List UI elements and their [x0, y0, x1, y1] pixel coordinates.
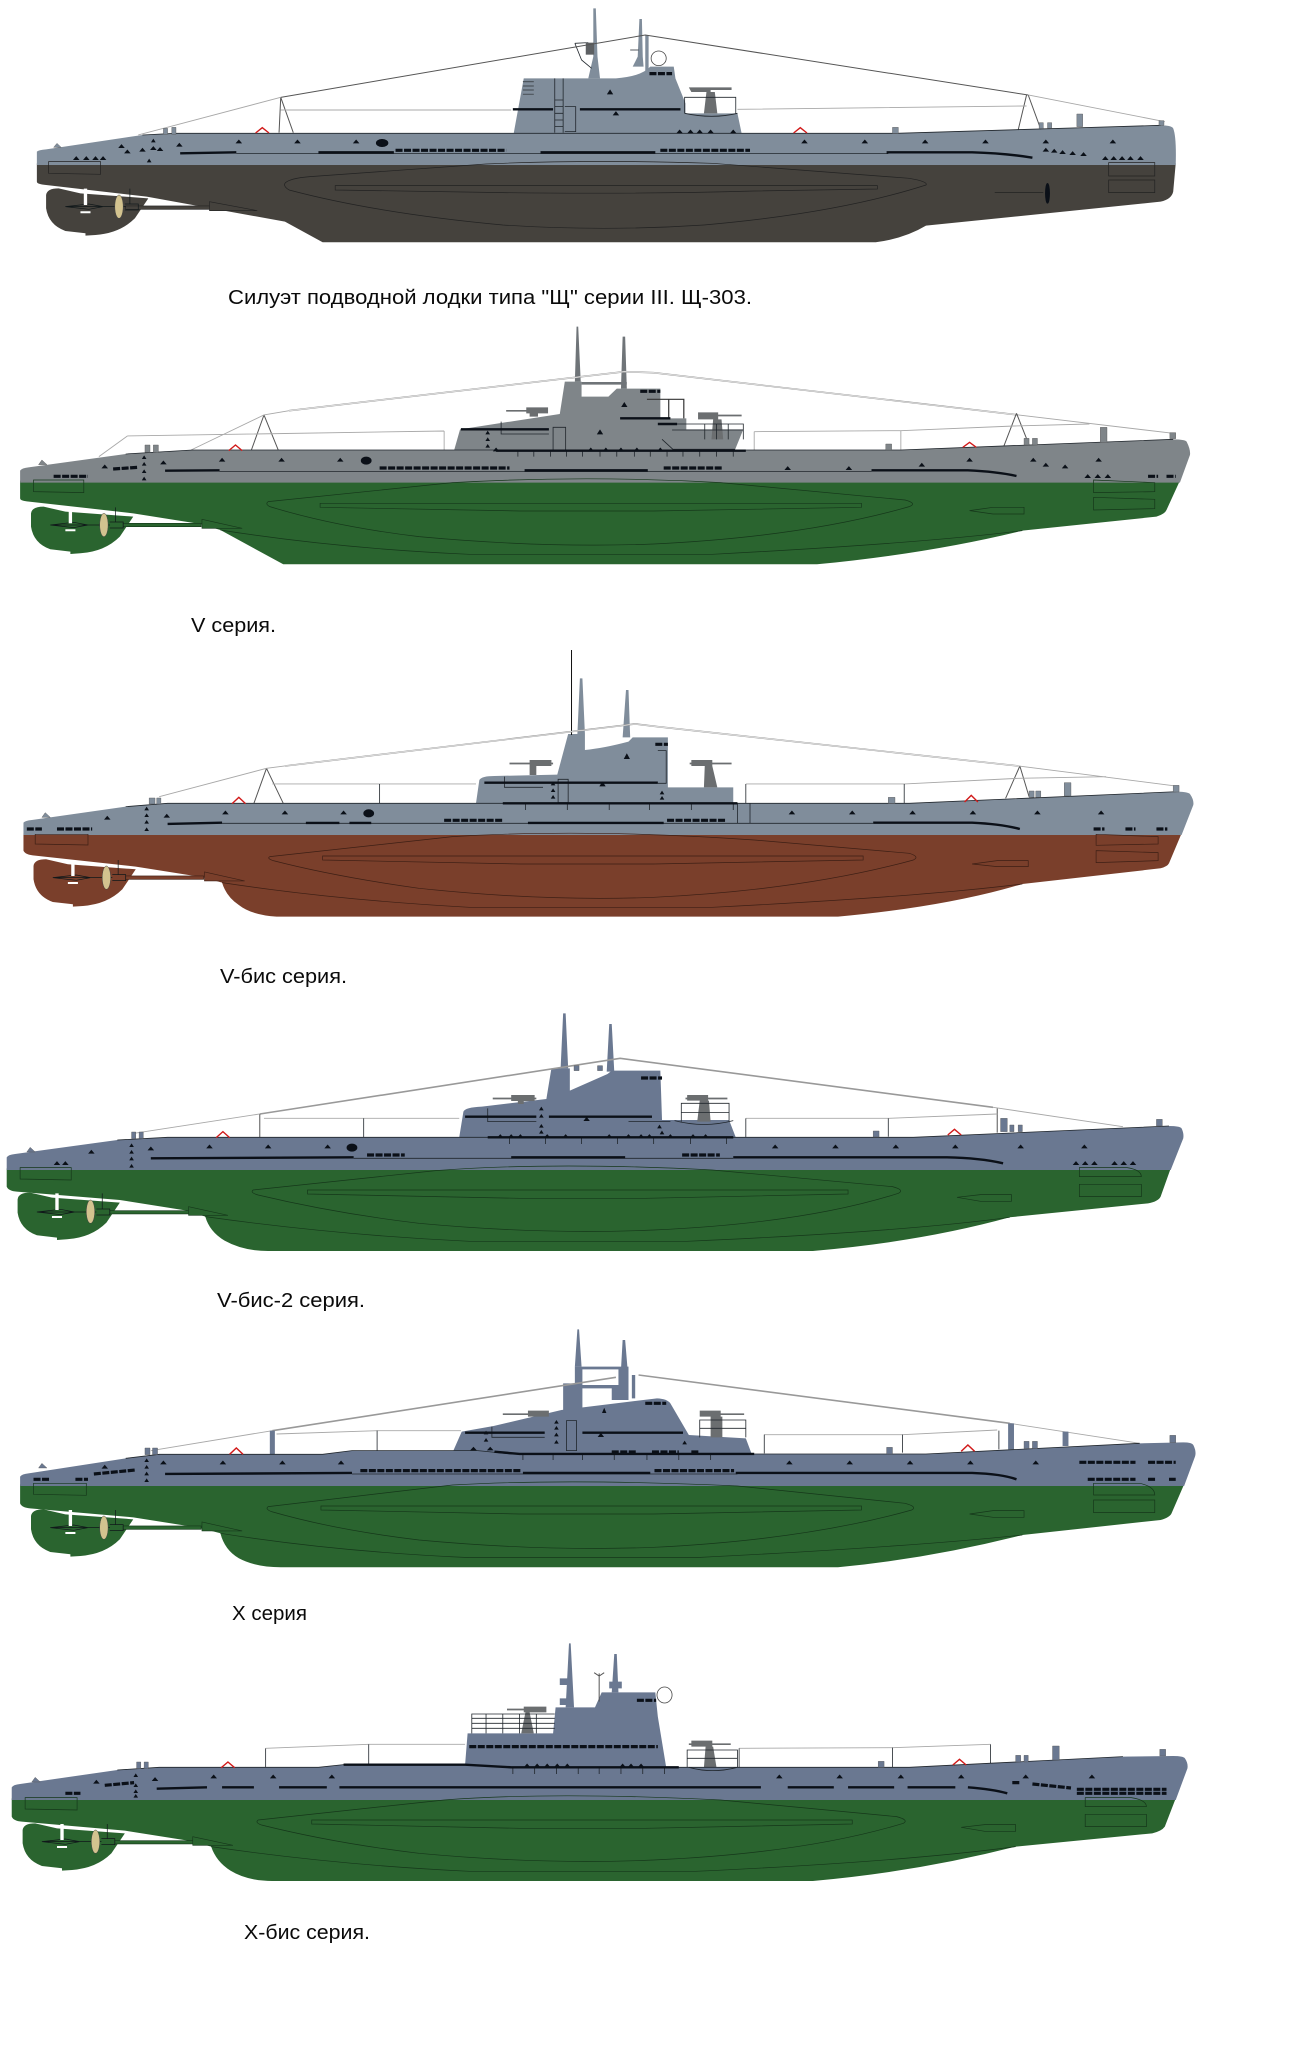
bow plane — [1045, 183, 1050, 203]
wires — [266, 1744, 991, 1748]
hull upper part — [12, 1756, 1188, 1800]
caption: series III: Силуэт подводной лодки типа "Щ" серии III. Щ-303. — [228, 287, 752, 309]
rigging — [279, 35, 1041, 133]
hull upper part — [37, 125, 1176, 165]
hatch port — [376, 139, 388, 147]
caption: series V-bis: V-бис серия. — [220, 966, 347, 988]
hull lines — [49, 161, 1155, 228]
propeller — [100, 513, 108, 537]
mast frame — [563, 1367, 629, 1410]
hull lower part — [7, 1168, 1171, 1251]
submarine: series V-bis — [23, 650, 1193, 917]
propeller — [115, 195, 123, 218]
hatch port — [347, 1144, 357, 1151]
rigging — [260, 1058, 997, 1137]
louvers — [523, 82, 534, 94]
aft gun — [689, 1741, 731, 1767]
rudder and stern — [34, 859, 136, 907]
aft platform rail — [662, 424, 743, 449]
stern plane — [50, 1510, 123, 1531]
black slits — [157, 1765, 1007, 1793]
deck and tower lines — [142, 78, 1161, 154]
stern plane — [65, 189, 138, 210]
caption: series V-bis-2: V-бис-2 серия. — [217, 1290, 365, 1312]
aft rail — [675, 1103, 733, 1124]
stanchions — [270, 1423, 1068, 1454]
hull upper part — [7, 1126, 1183, 1170]
conning tower — [514, 67, 742, 133]
hull lines — [34, 479, 1155, 554]
hull ports — [102, 1409, 1038, 1482]
rigging — [272, 1375, 1010, 1431]
life rings — [216, 1129, 961, 1138]
rudder gap — [65, 1510, 75, 1534]
aft gun — [700, 1411, 744, 1437]
deck and tower lines — [126, 422, 1173, 472]
deck and tower lines — [126, 751, 1177, 823]
shaft and fin — [115, 1837, 233, 1845]
conning tower — [459, 1068, 736, 1137]
slots — [396, 74, 750, 150]
wires — [159, 766, 1173, 797]
bollards — [39, 427, 1176, 465]
stern plane — [53, 860, 126, 881]
shaft and fin — [123, 1522, 242, 1531]
rudder gap — [65, 507, 75, 531]
radio ring — [657, 1687, 672, 1703]
bollards — [42, 783, 1179, 817]
forward gun — [506, 407, 548, 417]
submarine: Shch type series III — [37, 8, 1176, 242]
black slits — [165, 418, 1016, 476]
stern plane — [42, 1824, 115, 1845]
propeller — [102, 866, 111, 889]
propeller — [91, 1830, 100, 1853]
stern plane — [50, 507, 123, 528]
upper platform rail — [647, 399, 684, 418]
hull upper part — [20, 1442, 1196, 1486]
aft gun — [690, 760, 732, 787]
submarine: series X-bis — [12, 1643, 1188, 1881]
hull lines — [20, 1166, 1141, 1241]
hull lines — [34, 1482, 1155, 1558]
caption: series V: V серия. — [191, 615, 276, 637]
bollards — [39, 1435, 1176, 1468]
hull ports — [54, 1107, 1135, 1167]
stern plane — [37, 1193, 110, 1215]
wires — [99, 411, 1173, 457]
radio ring — [651, 51, 666, 66]
life rings — [230, 1445, 975, 1454]
masts — [561, 1013, 614, 1072]
flag mast — [571, 650, 573, 735]
aft gun — [698, 412, 742, 439]
slots — [65, 1700, 1166, 1793]
submarine: series V-bis-2 — [7, 1013, 1183, 1251]
hull lower part — [20, 481, 1180, 564]
wires — [151, 1423, 1140, 1451]
submarine: series X — [20, 1329, 1196, 1567]
deck and tower lines — [117, 1744, 1123, 1774]
propeller — [100, 1516, 108, 1539]
rigging — [251, 372, 1029, 450]
rudder gap — [68, 860, 78, 884]
life rings — [229, 442, 976, 451]
tower bracket and masts — [575, 327, 627, 389]
rudder and stern — [31, 507, 133, 554]
rudder gap — [80, 189, 91, 213]
hull lines — [25, 1796, 1146, 1871]
deck and tower lines — [126, 1421, 1140, 1474]
shaft and fin — [126, 202, 257, 211]
bollards — [27, 1066, 1162, 1152]
conning tower — [454, 382, 743, 450]
hull ports — [105, 754, 1104, 831]
forward gun — [507, 1707, 546, 1733]
hull lower part — [23, 833, 1182, 917]
forward gun — [493, 1095, 536, 1104]
hull lines — [35, 833, 1158, 907]
forward gun — [510, 760, 553, 775]
masts — [560, 1643, 622, 1707]
life rings — [256, 128, 807, 133]
wires — [134, 1107, 1123, 1133]
rudder and stern — [18, 1193, 120, 1240]
rudder gap — [52, 1193, 62, 1218]
deck gun — [685, 87, 737, 116]
rudder and stern — [46, 188, 148, 236]
rudder and stern — [31, 1509, 133, 1557]
propeller — [86, 1200, 95, 1223]
hull ports — [102, 403, 1110, 480]
masts and periscopes — [588, 8, 649, 78]
rudder and stern — [23, 1823, 125, 1871]
rigging — [254, 724, 1029, 803]
aft rail — [700, 1420, 746, 1437]
conning tower — [453, 1398, 752, 1454]
caption: series X: X серия — [232, 1603, 307, 1625]
hull ports — [94, 1764, 1094, 1797]
hull lower part — [37, 163, 1176, 242]
masts — [575, 1329, 635, 1398]
hull ports — [74, 90, 1143, 162]
bollards — [32, 1746, 1166, 1782]
masts — [577, 678, 630, 737]
life rings — [221, 1759, 966, 1768]
slots — [34, 1403, 1176, 1479]
rudder gap — [57, 1824, 67, 1848]
submarine: series V — [20, 327, 1190, 564]
slots — [367, 1078, 720, 1155]
hull lower part — [20, 1484, 1184, 1567]
slots — [27, 744, 1167, 829]
shaft and fin — [110, 1207, 228, 1215]
aft gun — [685, 1095, 727, 1122]
black slits — [165, 1433, 1016, 1479]
black slits — [151, 1117, 1003, 1163]
hatch port — [361, 457, 371, 464]
hull upper part — [23, 792, 1193, 835]
radar bracket — [575, 43, 639, 68]
bollards — [54, 114, 1164, 147]
shaft and fin — [126, 872, 245, 881]
conning tower — [465, 1692, 666, 1767]
life rings — [232, 795, 978, 804]
deck and tower lines — [117, 1108, 1169, 1158]
shaft and fin — [123, 519, 242, 528]
hull lower part — [12, 1798, 1176, 1881]
aft rail — [687, 1750, 737, 1771]
black slits — [168, 783, 1020, 829]
black slits — [180, 109, 1032, 158]
hatch port — [364, 810, 374, 817]
forward rail — [472, 1714, 555, 1733]
caption: series X-bis: X-бис серия. — [244, 1922, 370, 1944]
slots — [54, 391, 1176, 476]
wires — [138, 95, 1165, 135]
conning tower — [476, 734, 733, 803]
forward gun — [503, 1411, 549, 1417]
radio mast — [594, 1673, 604, 1702]
hull upper part — [20, 439, 1190, 483]
